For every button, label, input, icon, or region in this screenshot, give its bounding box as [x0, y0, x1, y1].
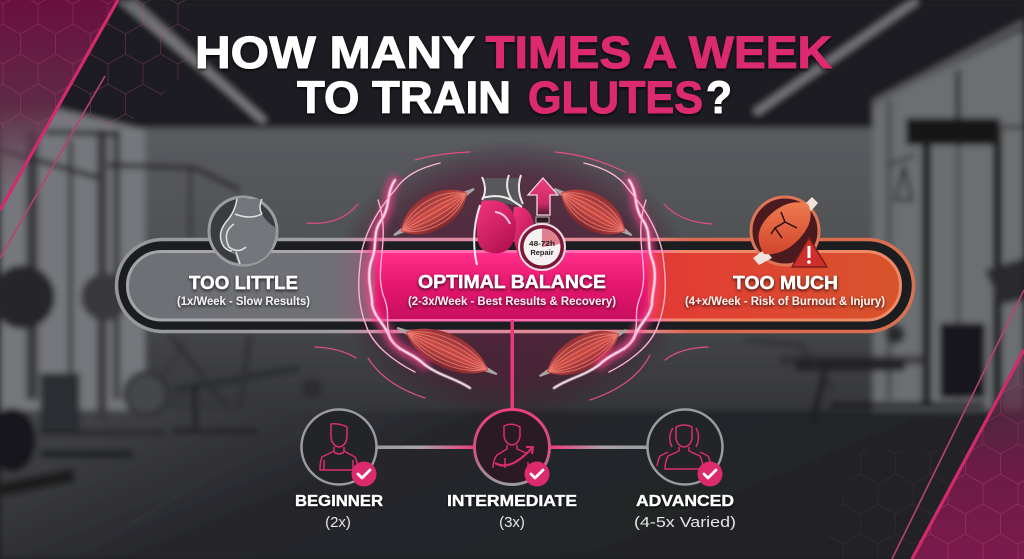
title: ?: [706, 72, 732, 123]
icon: person: [320, 424, 357, 470]
horizontal connector left: [377, 446, 474, 449]
label: INTERMEDIATE: [447, 493, 577, 510]
panel: balance bar: [116, 240, 914, 332]
title: GLUTES: [528, 72, 703, 123]
node: advanced: [634, 410, 736, 531]
icon: too much torn muscle with warning: [751, 197, 827, 267]
node: beginner: [295, 410, 383, 531]
panel text: too much: [685, 272, 885, 308]
outlines: [482, 175, 523, 204]
near glute: [477, 200, 516, 253]
node: intermediate: [447, 410, 577, 531]
icon: glute with upward arrow and repair timer: Repair: [530, 248, 554, 257]
icon: glute with upward arrow and repair timer: [474, 175, 565, 270]
warning triangle: [792, 238, 827, 267]
decorative corner: top left: [0, 0, 190, 258]
waist: [483, 178, 522, 206]
icon: glute with upward arrow and repair timer: 48-72h: [529, 239, 555, 248]
muscle: top left: [385, 173, 483, 251]
muscle: top right: [545, 173, 641, 251]
decorative corner: bottom right: [820, 290, 1024, 559]
panel text: optimal balance: (2-3x/Week - Best Results & Recovery): [408, 294, 616, 308]
check badge: [524, 462, 550, 486]
value: (2x): [325, 514, 351, 531]
icon: group of people: [657, 425, 711, 469]
muscle: bottom left: [390, 312, 504, 390]
far glute: [513, 207, 534, 258]
arrow up: [528, 178, 558, 215]
panel text: too much: (4+x/Week - Risk of Burnout & Injury): [685, 294, 885, 308]
label: ADVANCED: [636, 493, 734, 510]
panel text: too much: TOO MUCH: [733, 272, 838, 293]
check badge: [698, 462, 722, 486]
icon: too little glute: [209, 197, 277, 265]
value: (4-5x Varied): [634, 514, 736, 531]
icon: person with progress arrow: [493, 424, 533, 470]
label: BEGINNER: [295, 493, 383, 510]
panel text: too little: [177, 272, 310, 308]
value: (3x): [499, 514, 525, 531]
title: TIMES A WEEK: [486, 27, 833, 78]
vertical connector line: [510, 320, 514, 410]
panel text: optimal balance: OPTIMAL BALANCE: [418, 271, 606, 292]
panel text: too little: (1x/Week - Slow Results): [177, 294, 310, 308]
title: TO TRAIN: [297, 72, 511, 123]
panel text: too little: TOO LITTLE: [189, 272, 298, 293]
timer: [536, 217, 549, 223]
check badge: [352, 462, 376, 486]
electric energy ring: [307, 152, 712, 400]
horizontal connector right: [550, 446, 647, 449]
centre glow behind optimal section: [332, 140, 692, 420]
title: HOW MANY: [195, 27, 475, 78]
muscle: bottom right: [531, 315, 635, 391]
title: [195, 27, 833, 123]
panel text: optimal balance: [408, 271, 616, 308]
